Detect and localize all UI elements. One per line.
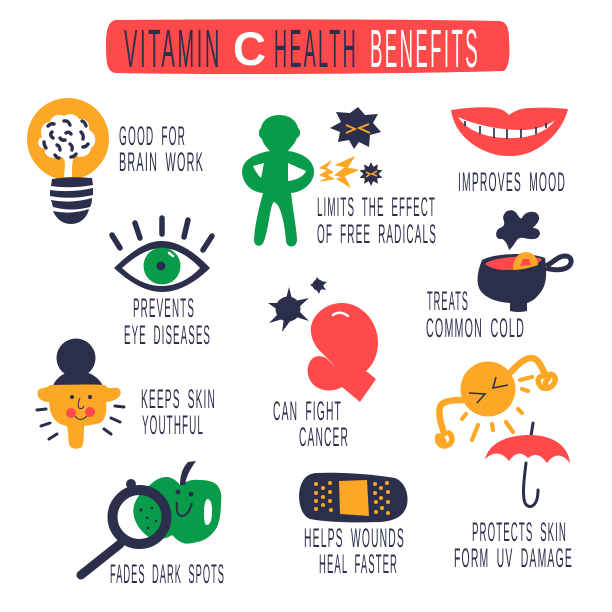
- text: BRAIN WORK: [119, 147, 204, 177]
- icon: red umbrella: [485, 423, 570, 507]
- text: GOOD FOR: [119, 121, 186, 151]
- label: prevents eye diseases: [124, 293, 211, 350]
- text: PREVENTS: [133, 293, 195, 323]
- icon: adhesive bandage: [299, 473, 408, 522]
- label: helps wounds heal faster: [304, 523, 405, 579]
- title banner: HEALTH: [274, 19, 358, 79]
- text: EYE DISEASES: [124, 320, 211, 350]
- icon: red boxing glove: [308, 303, 378, 402]
- label: can fight cancer: [273, 396, 349, 452]
- text: KEEPS SKIN: [141, 384, 216, 414]
- label: treats common cold: [426, 286, 525, 343]
- icon: green man with hands on hips: [242, 115, 314, 247]
- icon: small spiky ball: [310, 277, 327, 294]
- text: CAN FIGHT: [273, 396, 342, 426]
- text: FADES DARK SPOTS: [110, 559, 225, 589]
- title banner: VITAMIN: [124, 19, 222, 79]
- label: good for brain work: [119, 121, 204, 177]
- text: HELPS WOUNDS: [304, 523, 405, 553]
- icon: smiling red lips: [451, 107, 568, 156]
- icon: steam cloud: [496, 210, 540, 250]
- title banner: [106, 19, 509, 79]
- label: treats common cold: TREATS: [427, 286, 469, 316]
- text: YOUTHFUL: [142, 410, 204, 440]
- icon: small free radical star: [360, 162, 382, 186]
- icon: squinting sun with arms: [438, 358, 555, 446]
- icon: girl's face with hair bun: [37, 338, 124, 449]
- icon: lightning bolts: [320, 157, 358, 187]
- icon: magnifying glass: [81, 479, 166, 575]
- text: HEAL FASTER: [319, 549, 398, 579]
- icon: big free radical star: [330, 107, 381, 149]
- label: limits the effect of free radicals: [317, 192, 437, 249]
- text: CANCER: [299, 422, 349, 452]
- icon: light bulb with brain: [27, 98, 109, 224]
- label: keeps skin youthful: [141, 384, 216, 440]
- title banner: C: [233, 22, 266, 75]
- icon: spiky ball: [268, 287, 309, 332]
- icon: tea cup with citrus: [478, 252, 571, 312]
- icon: green apple with smile: [133, 461, 221, 544]
- icon: eye with lashes: [112, 218, 212, 292]
- label: protects skin from UV damage: [454, 517, 573, 573]
